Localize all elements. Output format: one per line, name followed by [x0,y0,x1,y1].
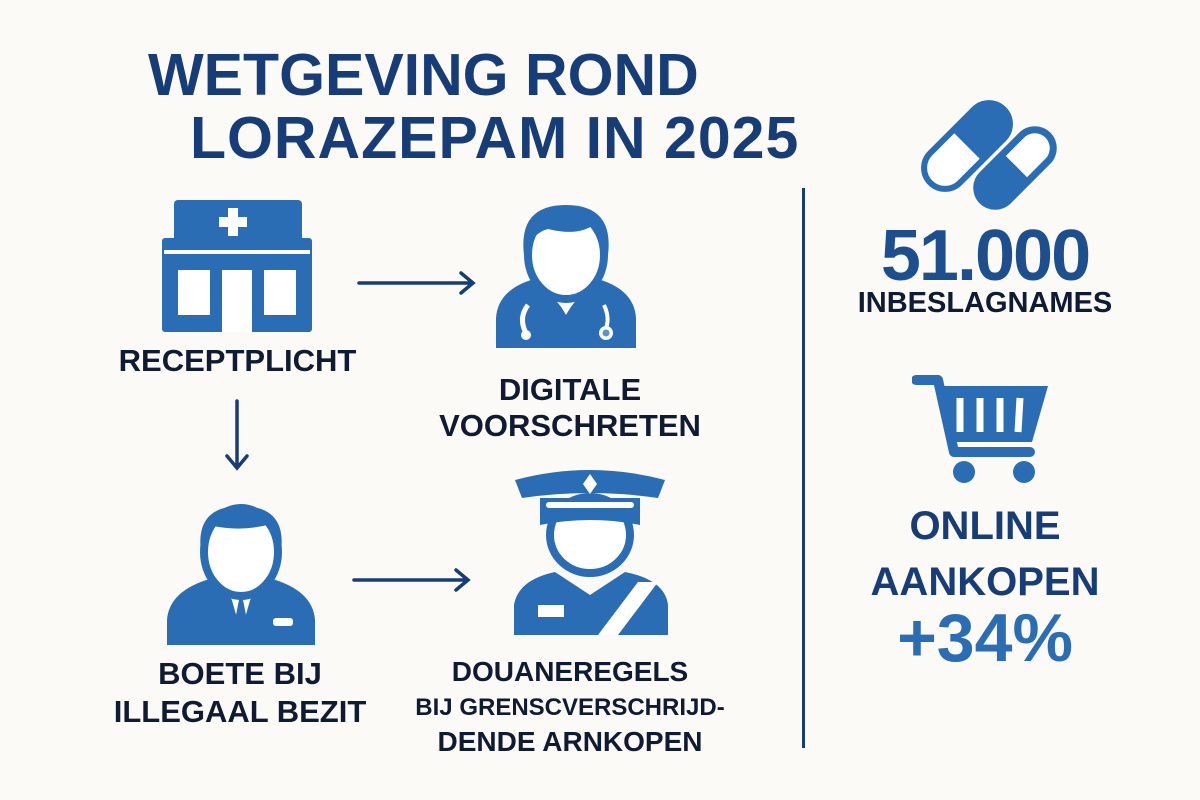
text: douaneregels: DENDE ARNKOPEN [438,726,702,757]
arrow: right 1 [357,271,476,295]
stat: +34%: +34% [897,600,1073,676]
stat: 51.000: 51.000 [881,216,1089,296]
text: douaneregels: DOUANEREGELS [452,656,688,687]
text: digitale voorschreten: VOORSCHRETEN [439,408,701,443]
icon: customs officer [514,470,668,635]
arrow: right 2 [352,568,471,592]
text: digitale voorschreten: DIGITALE [499,372,641,407]
text: receptplicht: RECEPTPLICHT [119,343,356,378]
icon: pharmacy [162,200,312,332]
icon: cart [912,375,1048,483]
icon: person [167,504,315,645]
text: boete bij illegaal bezit: BOETE BIJ [158,656,322,691]
text: douaneregels [415,656,725,757]
title [148,42,799,171]
text: boete bij illegaal bezit [114,656,366,729]
title: LORAZEPAM IN 2025 [190,105,799,171]
icon: pills [921,100,1057,210]
text: online aankopen: AANKOPEN [871,560,1099,604]
text: douaneregels: BIJ GRENSCVERSCHRIJD- [415,694,725,721]
text: online aankopen: ONLINE [909,504,1061,548]
arrow: down [225,399,249,471]
icon: doctor [496,205,636,348]
text: online aankopen [871,504,1099,604]
text: inbeslagnames: INBESLAGNAMES [858,287,1112,319]
title: WETGEVING ROND [148,42,699,108]
text: boete bij illegaal bezit: ILLEGAAL BEZIT [114,694,366,729]
text: digitale voorschreten [439,372,701,443]
